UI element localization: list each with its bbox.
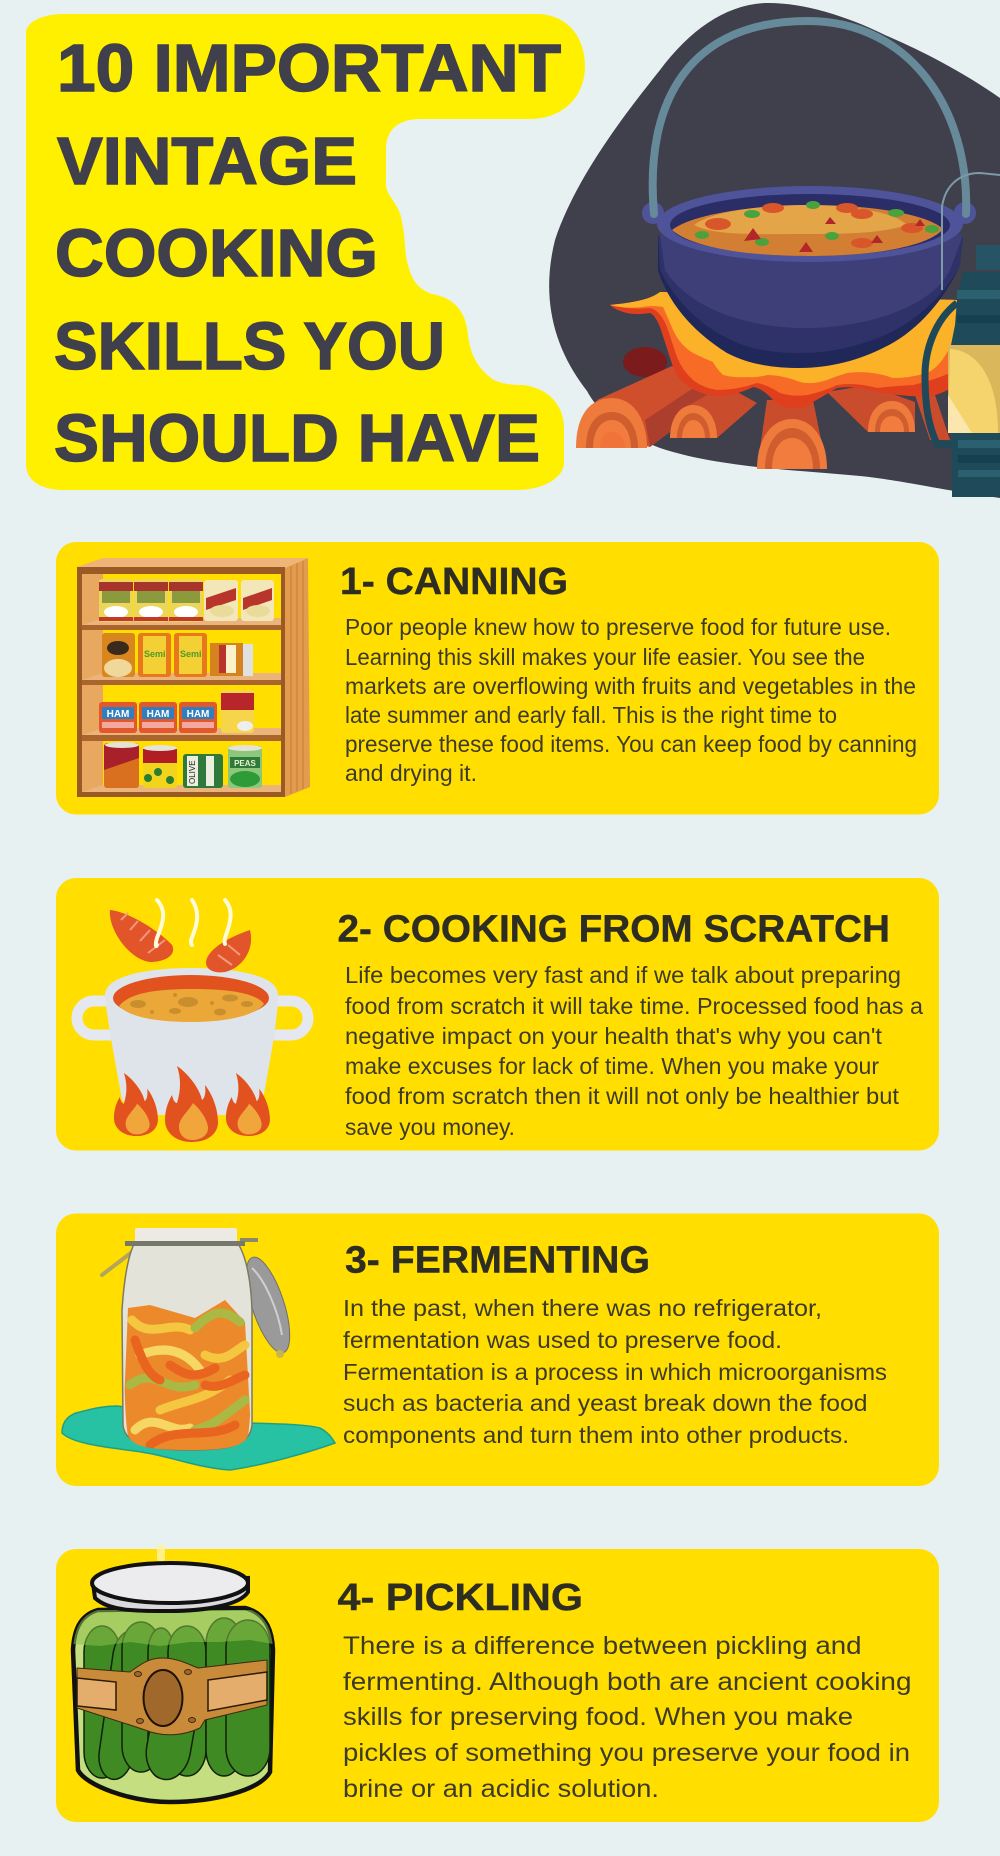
cans row 3: HAM	[187, 709, 209, 720]
cauldron rim	[657, 186, 963, 262]
stew	[672, 205, 943, 256]
lantern glass	[948, 345, 1000, 433]
icon: boiling pot with flames	[77, 900, 308, 1142]
steam	[156, 900, 231, 946]
title yellow blob	[26, 14, 585, 490]
heading: fermenting: 3- FERMENTING	[345, 1240, 650, 1282]
title text: SHOULD HAVE	[54, 401, 540, 476]
lantern cap	[951, 272, 1000, 345]
jar body	[73, 1608, 273, 1802]
cans row 4: OLIVE	[188, 760, 197, 784]
text block: cooking from scratch: Life becomes very fast and if we talk about preparing	[345, 962, 901, 988]
panel: pickling	[56, 1544, 939, 1822]
grilled meat pieces	[110, 910, 251, 972]
pot handles	[77, 1001, 127, 1035]
shelf frame	[77, 567, 285, 797]
jar neck and lid seal	[125, 1228, 245, 1246]
panel background	[56, 1549, 939, 1822]
panel: cooking from scratch	[56, 878, 939, 1150]
right flame	[226, 1073, 270, 1136]
text block: canning: and drying it.	[345, 760, 477, 786]
small left log	[670, 385, 757, 438]
icon: pickle jar	[73, 1563, 273, 1802]
shelf side	[285, 558, 310, 797]
cans row 2: Semi	[144, 649, 166, 659]
text block: cooking from scratch: make excuses for lack of time. When you make your	[345, 1053, 879, 1079]
shelf top	[77, 558, 308, 568]
text block: fermenting: In the past, when there was no refrigerator,	[343, 1295, 822, 1321]
jar wire clasp	[102, 1240, 258, 1275]
cans row 3: HAM	[107, 709, 129, 720]
cans row 1	[99, 579, 274, 622]
small right log	[827, 385, 950, 440]
text block: canning	[345, 614, 917, 786]
panel background	[56, 878, 939, 1150]
text block: canning: markets are overflowing with fruits and vegetables in the	[345, 673, 916, 699]
shelf boards	[82, 618, 281, 792]
title text: SKILLS YOU	[54, 309, 445, 384]
text block: pickling	[343, 1632, 912, 1803]
cans row 3	[99, 690, 254, 733]
text block: canning: preserve these food items. You can keep food by canning	[345, 731, 917, 757]
text block: cooking from scratch	[345, 962, 923, 1140]
text block: cooking from scratch: save you money.	[345, 1114, 515, 1140]
text block: fermenting: components and turn them into other products.	[343, 1422, 849, 1448]
text block: pickling: skills for preserving food. When you make	[343, 1703, 853, 1731]
shelf inner wall	[82, 574, 103, 792]
text block: fermenting: such as bacteria and yeast break down the food	[343, 1390, 868, 1416]
text block: cooking from scratch: negative impact on your health that's why you can't	[345, 1023, 883, 1049]
left flame	[114, 1073, 158, 1136]
heading: canning: 1- CANNING	[340, 561, 568, 603]
cans row 4: PEAS	[234, 759, 257, 768]
lantern handle arc	[925, 303, 960, 445]
text block: cooking from scratch: food from scratch it will take time. Processed food has a	[345, 993, 923, 1019]
center log	[757, 400, 827, 469]
text block: cooking from scratch: food from scratch then it will not only be healthier but	[345, 1083, 900, 1109]
icon: fermenting jar on cloth	[62, 1228, 335, 1470]
cauldron handle	[653, 21, 966, 214]
lantern base	[952, 433, 1000, 497]
text block: pickling: There is a difference between pickling and	[343, 1632, 862, 1660]
cloth	[62, 1406, 335, 1470]
panel background	[56, 542, 939, 814]
cauldron ears	[642, 202, 664, 224]
cans row 4	[104, 742, 262, 788]
title text: COOKING	[55, 216, 378, 291]
left log	[576, 366, 720, 448]
back log end	[623, 347, 667, 377]
flames under pot	[114, 1066, 270, 1142]
stew vegetables	[695, 201, 939, 252]
title text	[54, 31, 561, 476]
lantern	[925, 173, 1000, 497]
text block: fermenting	[343, 1295, 887, 1448]
panel: canning	[56, 542, 939, 814]
jar body	[122, 1242, 252, 1450]
cans row 3: HAM	[147, 709, 169, 720]
jar lid	[92, 1563, 248, 1611]
text block: pickling: pickles of something you preserve your food in	[343, 1739, 910, 1767]
lantern thin wire	[942, 173, 1000, 290]
steam wisp	[157, 1544, 165, 1562]
cauldron	[642, 186, 976, 368]
pickle label	[77, 1658, 267, 1735]
text block: canning: Poor people knew how to preserve food for future use.	[345, 614, 891, 640]
text block: canning: Learning this skill makes your life easier. You see the	[345, 644, 865, 670]
text block: fermenting: Fermentation is a process in which microorganisms	[343, 1359, 887, 1385]
panel: fermenting	[56, 1214, 939, 1486]
icon: pantry shelf of cans	[77, 558, 310, 797]
title text: 10 IMPORTANT	[57, 31, 561, 106]
heading: cooking from scratch: 2- COOKING FROM SCRATCH	[338, 908, 890, 950]
text block: pickling: fermenting. Although both are ancient cooking	[343, 1668, 912, 1696]
flames	[610, 292, 957, 408]
pickles	[73, 1610, 273, 1783]
panel background	[56, 1214, 939, 1486]
kimchi contents	[122, 1300, 252, 1450]
cans row 2	[102, 633, 253, 677]
dark background blob	[549, 3, 1000, 498]
title banner	[26, 14, 585, 490]
lantern finial	[976, 245, 1000, 270]
logs	[576, 347, 950, 469]
text block: canning: late summer and early fall. This is the right time to	[345, 702, 837, 728]
heading: pickling: 4- PICKLING	[338, 1577, 583, 1619]
open lid	[237, 1253, 299, 1358]
title text: VINTAGE	[57, 124, 357, 199]
hero illustration: pot over a fire with lantern	[549, 3, 1000, 498]
cauldron body	[658, 235, 963, 368]
text block: pickling: brine or an acidic solution.	[343, 1775, 659, 1803]
center flame	[165, 1066, 218, 1142]
text block: fermenting: fermentation was used to preserve food.	[343, 1327, 782, 1353]
pot body	[105, 968, 278, 1115]
soup	[113, 975, 269, 1022]
cans row 2: Semi	[180, 649, 202, 659]
